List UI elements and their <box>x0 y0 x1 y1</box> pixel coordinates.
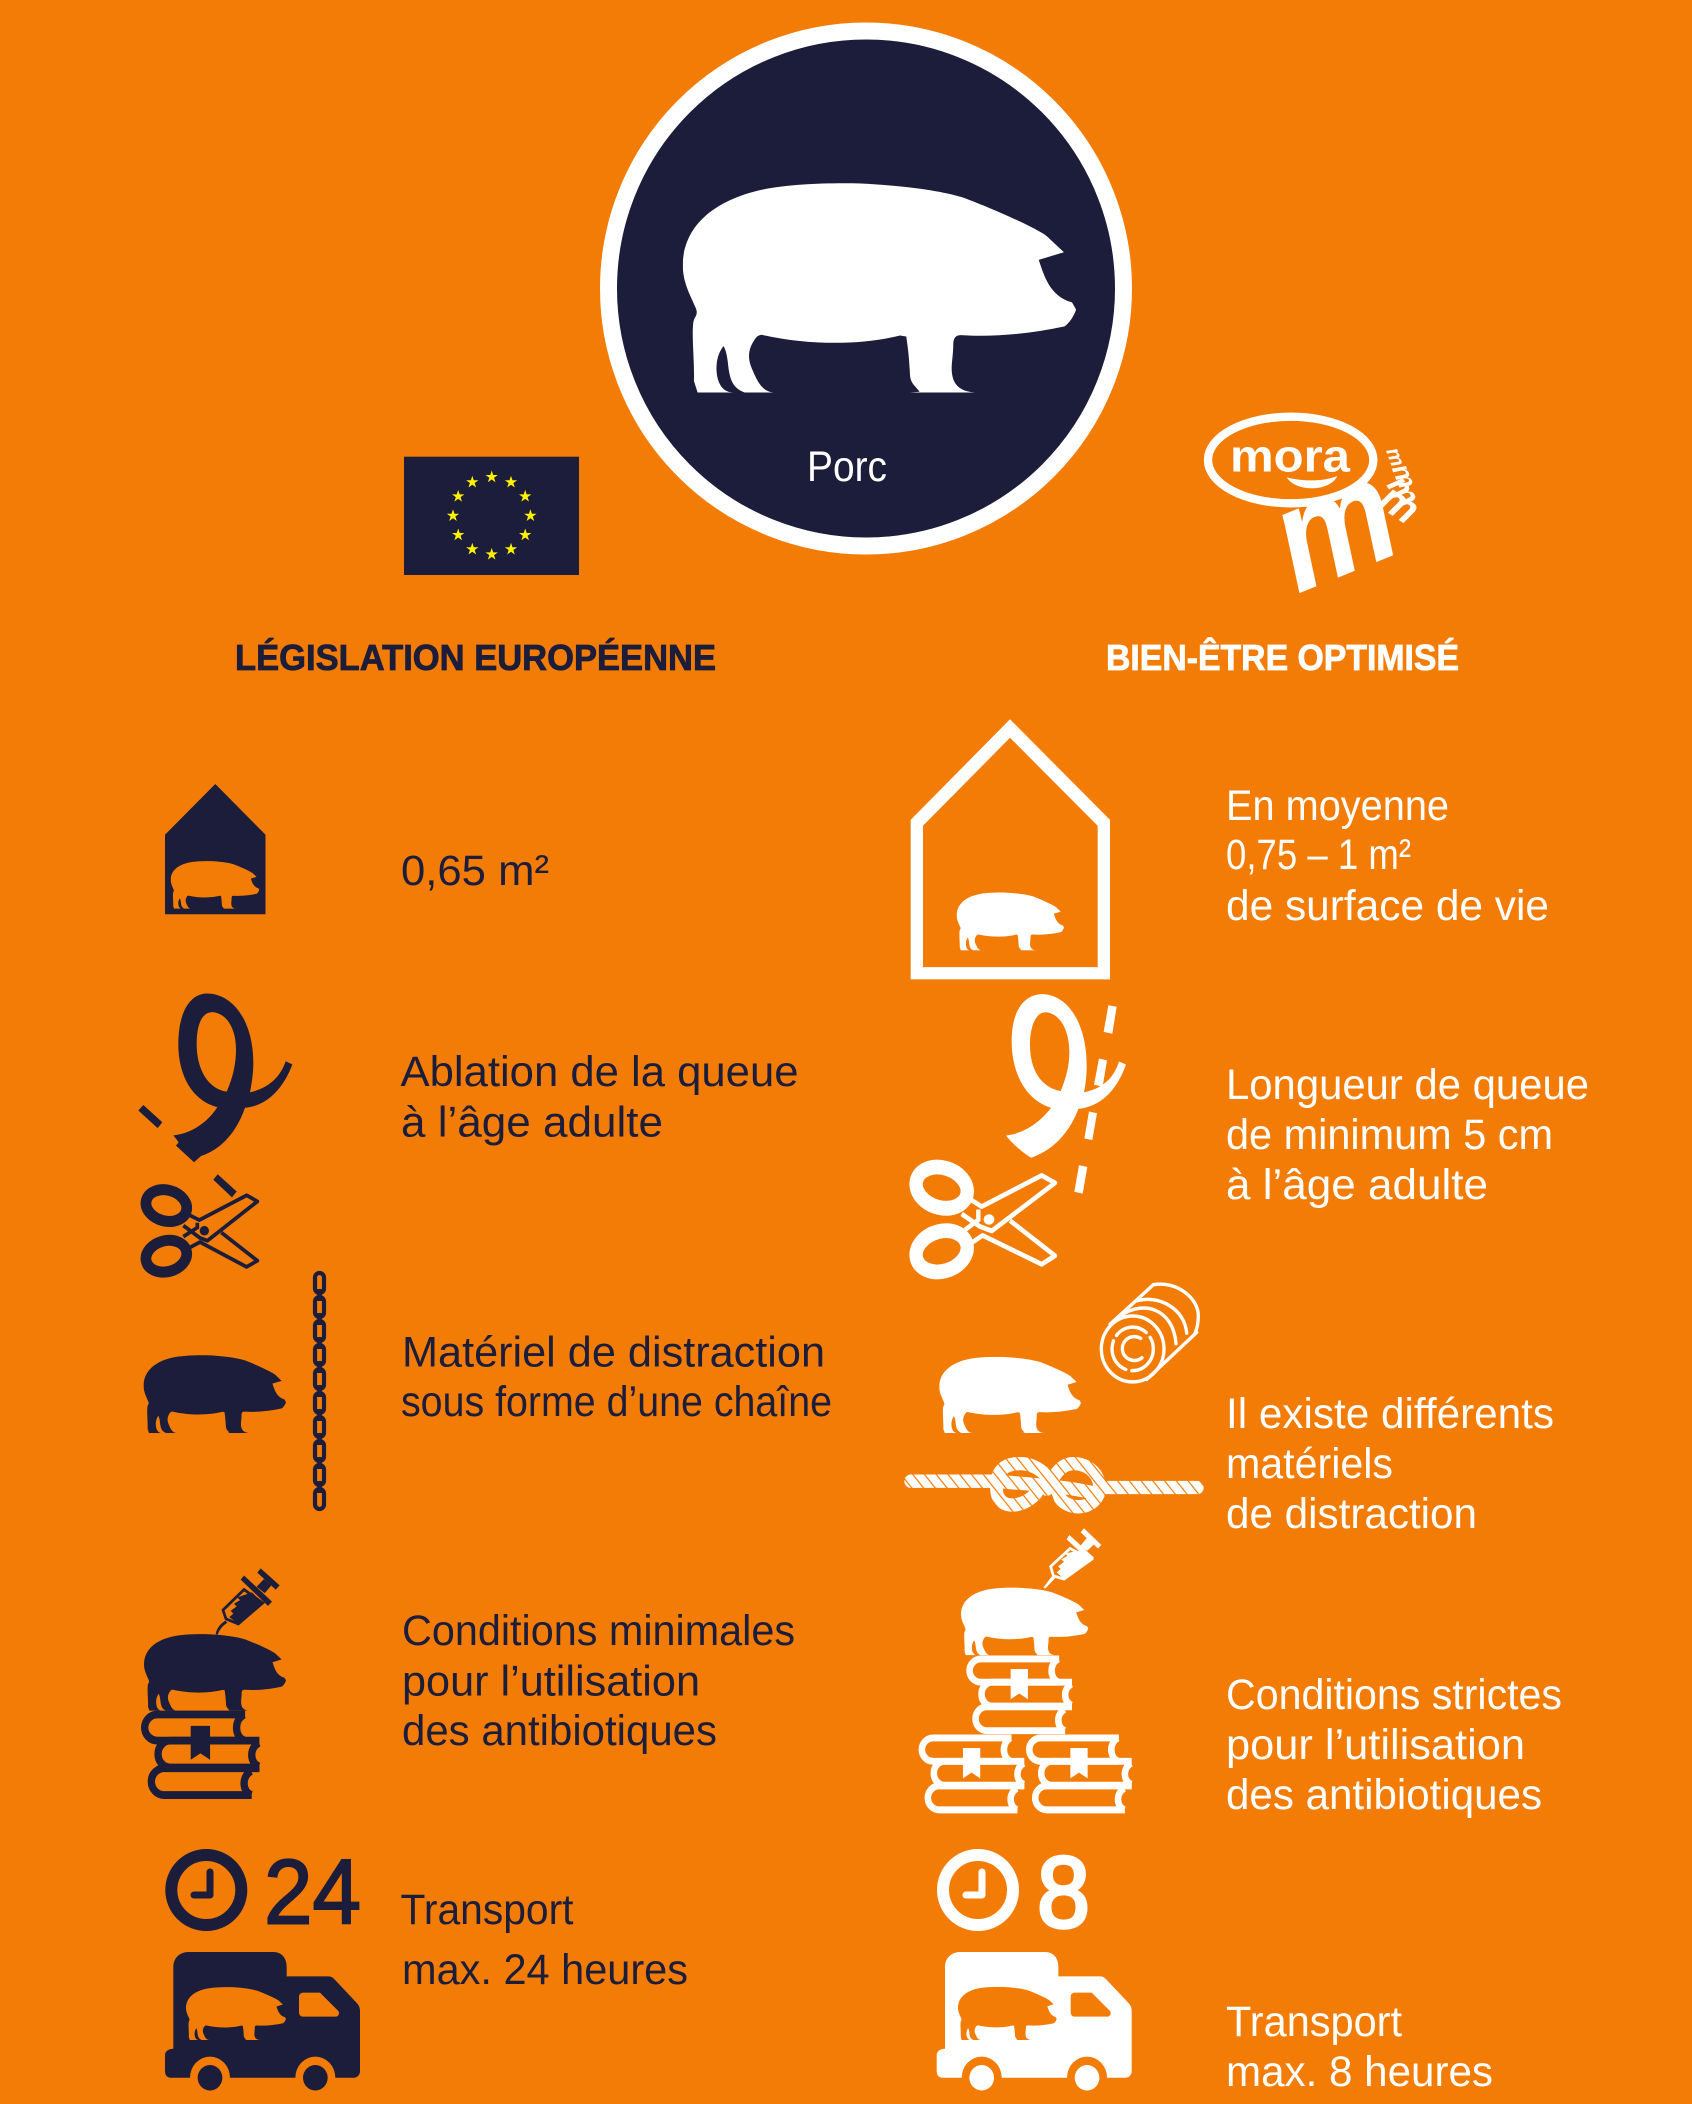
icon: white outlined house with pig <box>911 719 1110 979</box>
text: antibiotics right: des antibiotiques <box>1226 1771 1542 1819</box>
icon: books stack bottom left <box>922 1738 1024 1810</box>
icon: curled tail <box>1006 994 1126 1158</box>
text: antibiotics right: Conditions strictes <box>1226 1671 1562 1719</box>
icon: chain <box>315 1273 324 1509</box>
logo: mora: m <box>1247 424 1419 623</box>
icon: European Union flag <box>404 457 579 575</box>
icon: long tail and scissors right <box>912 994 1126 1278</box>
logo: mora: m <box>1379 468 1427 514</box>
logo: mora: m <box>1372 473 1429 533</box>
text: tail right: Longueur de queue <box>1226 1061 1589 1109</box>
icon: truck with pig <box>165 1952 360 2090</box>
icon: knotted rope <box>911 1464 1197 1507</box>
icon: hay bale <box>1101 1284 1198 1382</box>
text: tail left: Ablation de la queue <box>400 1048 798 1096</box>
icon: truck with pig <box>937 1952 1132 2090</box>
icon: pig with chain <box>144 1273 324 1509</box>
number: 8: 8 <box>1037 1837 1090 1949</box>
text: distraction left: sous forme d’une chaîne <box>401 1378 832 1426</box>
text: surface left: 0,65 m² <box>401 847 549 895</box>
text: tail right: à l’âge adulte <box>1226 1161 1488 1209</box>
text: antibiotics right <box>1226 1671 1562 1819</box>
icon: clock <box>943 1855 1013 1925</box>
text: distraction left <box>401 1328 832 1426</box>
text: transport left: Transport <box>400 1886 574 1934</box>
number: 24: 24 <box>264 1842 361 1944</box>
text: transport right: max. 8 heures <box>1226 2048 1493 2096</box>
text: surface right <box>1226 782 1549 930</box>
text: antibiotics left <box>402 1607 795 1755</box>
icon: curled tail <box>173 993 292 1162</box>
text: surface right: 0,75 – 1 m² <box>1226 831 1411 879</box>
icon: docked tail and scissors left <box>138 993 292 1276</box>
icon: syringe, pig on books left <box>144 1568 286 1795</box>
label: Porc: Porc <box>807 443 887 491</box>
text: surface right: de surface de vie <box>1226 882 1549 930</box>
text: transport left: max. 24 heures <box>402 1946 688 1994</box>
icon: navy house with pig <box>165 784 266 914</box>
text: transport right <box>1226 1998 1493 2096</box>
text: antibiotics left: pour l’utilisation <box>402 1658 700 1706</box>
text: tail right: de minimum 5 cm <box>1226 1111 1553 1159</box>
text: tail right <box>1226 1061 1589 1209</box>
icon: clock 24 hours and truck <box>165 1842 361 2090</box>
icon: books stack top <box>970 1659 1072 1731</box>
text: distraction right: Il existe différents <box>1226 1390 1554 1438</box>
icon: syringe <box>1043 1528 1101 1589</box>
icon: clock <box>171 1855 241 1925</box>
icon: books <box>145 1715 259 1795</box>
icon: pig with hay bale and rope <box>911 1284 1198 1507</box>
heading: Bien-être optimisé: BIEN-ÊTRE OPTIMISÉ <box>1106 636 1459 678</box>
logo: mora: m <box>1386 459 1423 493</box>
text: distraction right: matériels <box>1226 1440 1393 1488</box>
text: transport left <box>400 1886 688 1994</box>
icon: syringe <box>216 1568 280 1635</box>
text: antibiotics left: Conditions minimales <box>402 1607 795 1655</box>
emblem: pig in navy circle <box>608 31 1124 546</box>
icon: clock 8 hours and truck <box>937 1837 1132 2090</box>
dashed line <box>1074 1005 1117 1194</box>
cut marks <box>138 1105 237 1197</box>
heading: Législation européenne: LÉGISLATION EUROPÉENNE <box>235 637 716 678</box>
text: distraction right <box>1226 1390 1554 1538</box>
text: surface right: En moyenne <box>1226 782 1449 830</box>
text: distraction right: de distraction <box>1226 1490 1477 1538</box>
text: antibiotics left: des antibiotiques <box>402 1707 717 1755</box>
text: tail left <box>400 1048 798 1146</box>
icon: white pig <box>683 183 1076 392</box>
text: antibiotics right: pour l’utilisation <box>1226 1721 1525 1769</box>
text: transport right: Transport <box>1226 1998 1402 2046</box>
text: distraction left: Matériel de distraction <box>402 1328 825 1376</box>
icon: syringe, pig on books right <box>922 1528 1132 1810</box>
icon: scissors <box>912 1161 1055 1278</box>
logo: mora: m <box>1381 445 1409 470</box>
icon: scissors <box>143 1185 257 1276</box>
text: tail left: à l’âge adulte <box>401 1098 663 1146</box>
logo: mora: mora <box>1230 431 1351 482</box>
icon: books stack bottom right <box>1029 1738 1132 1810</box>
